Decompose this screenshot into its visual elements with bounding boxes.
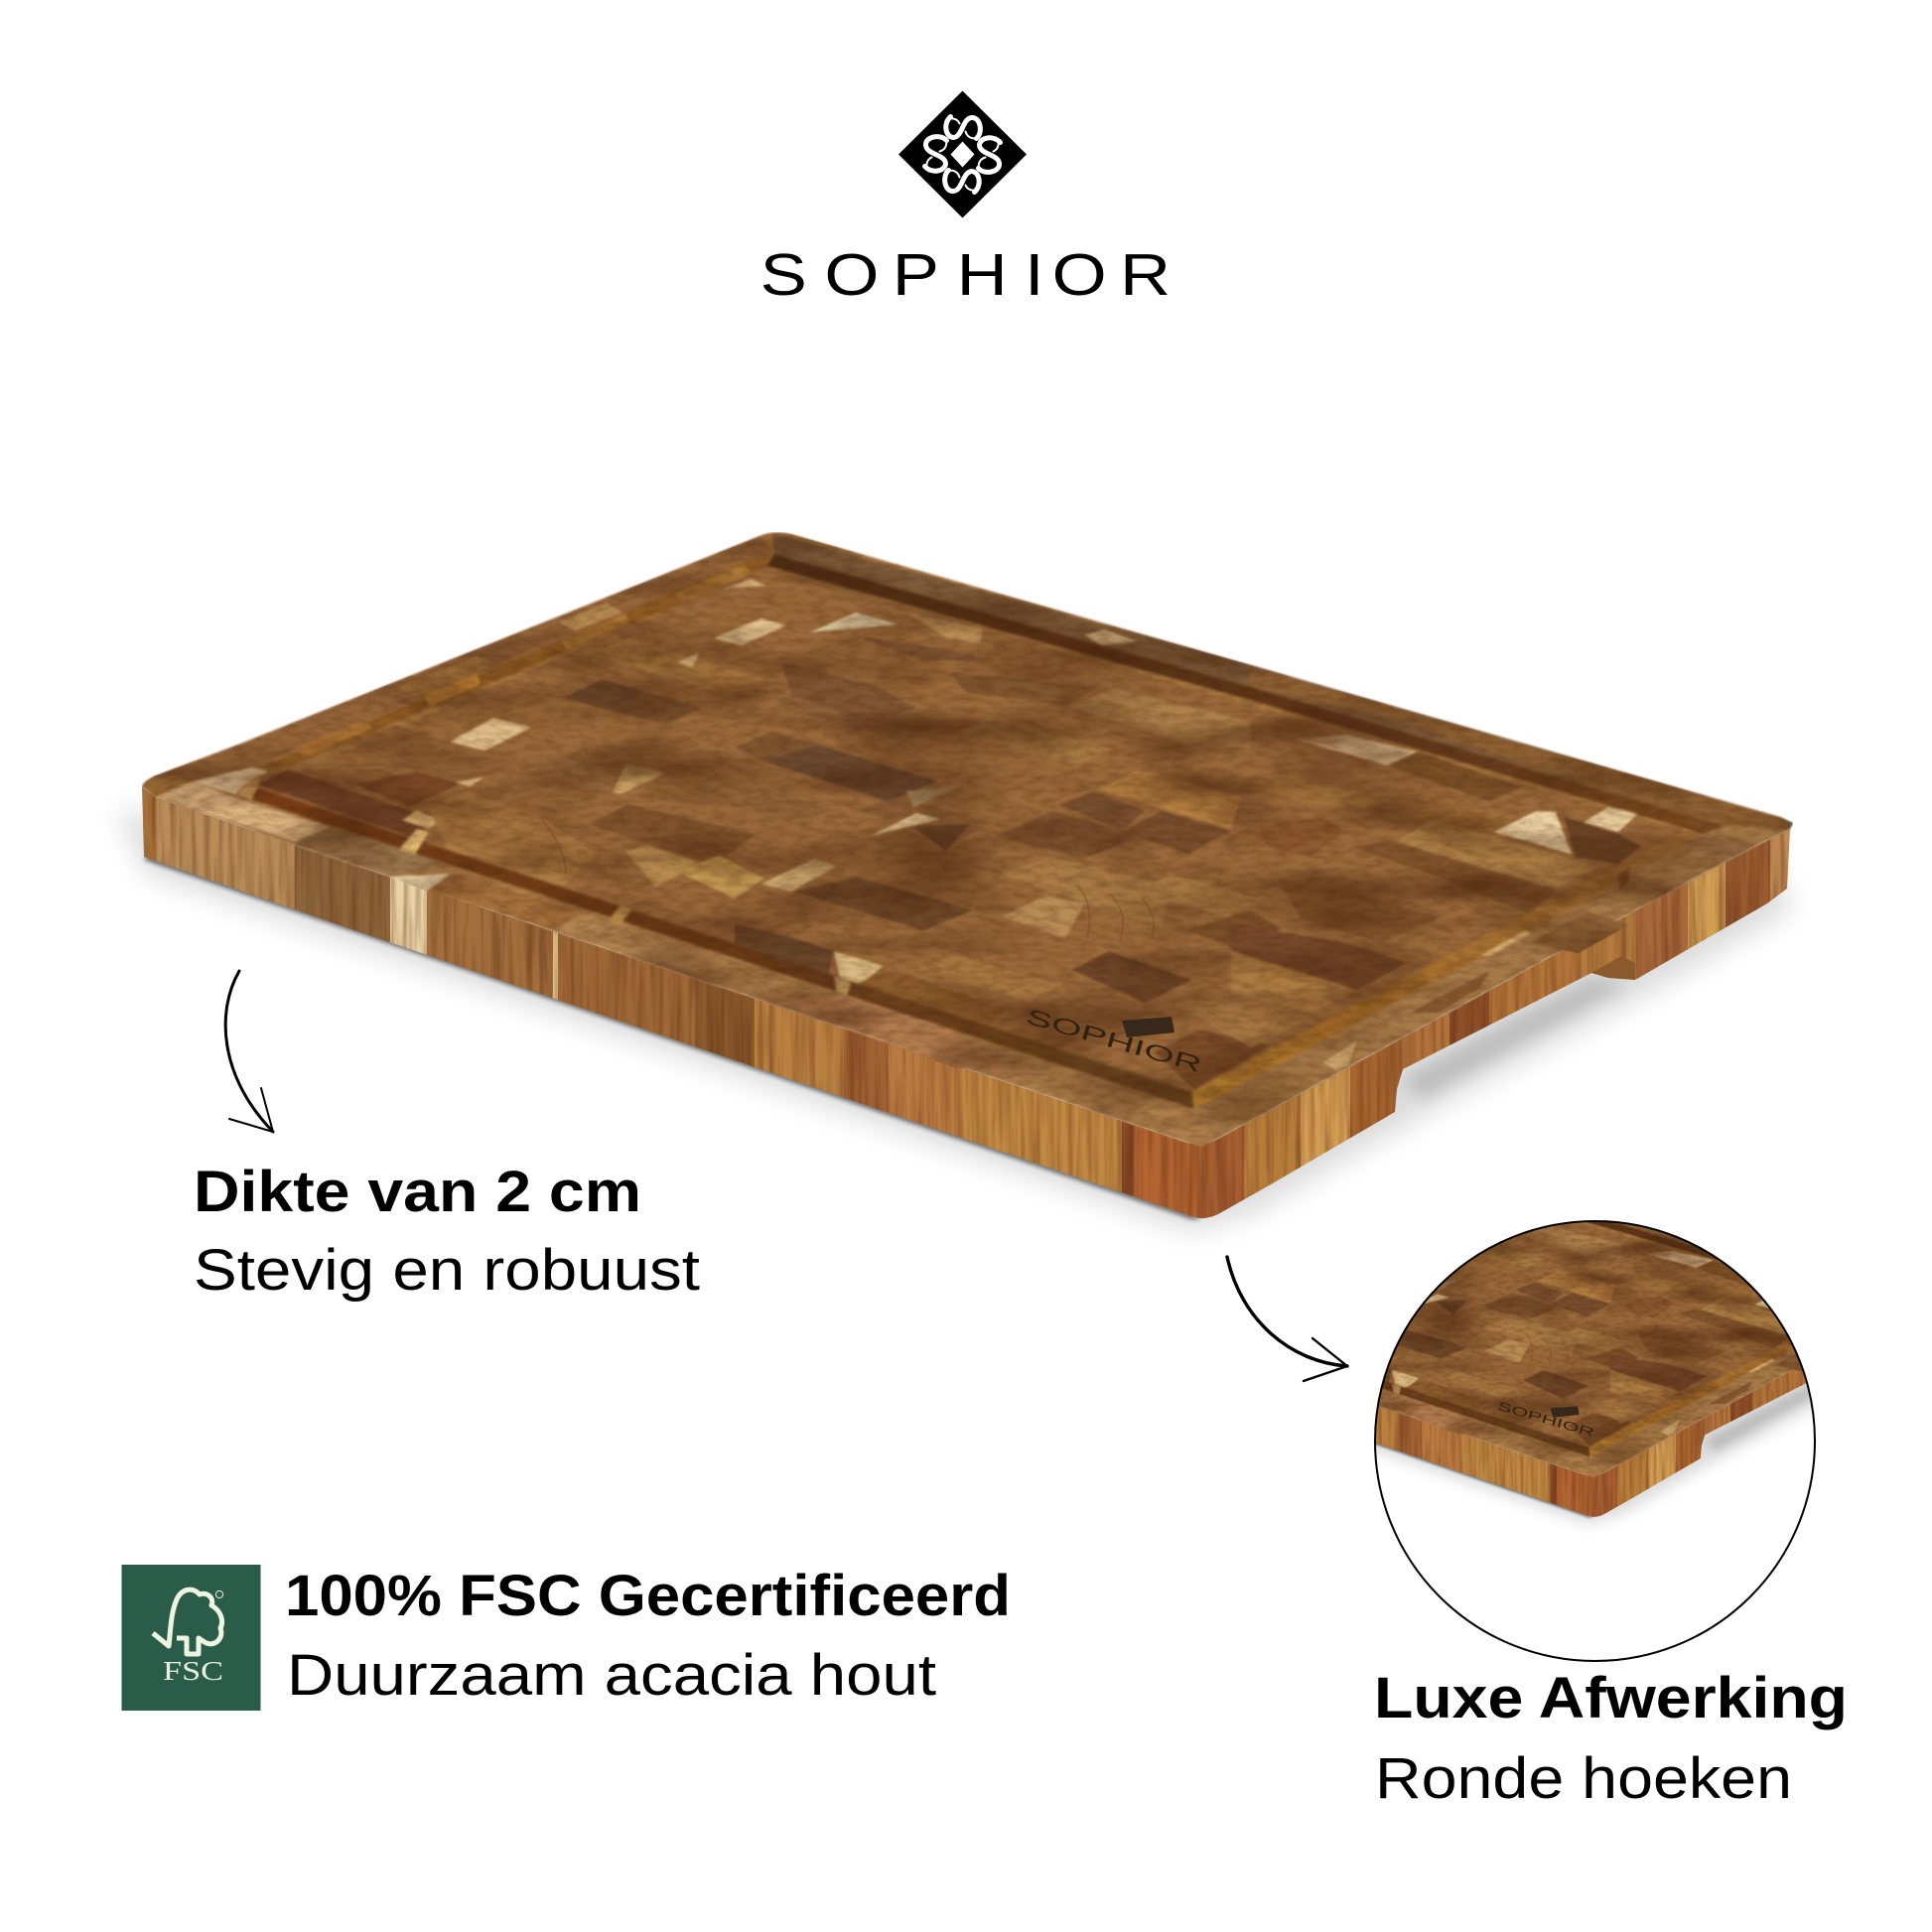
cutting board — [117, 532, 1807, 1231]
icon: FSC badge: FSC — [163, 1656, 223, 1686]
callout: FSC certification: Duurzaam acacia hout — [287, 1643, 936, 1708]
callout: thickness — [194, 1160, 700, 1303]
callout: FSC certification: 100% FSC Gecertificeerd — [285, 1564, 1011, 1628]
callout: thickness: Dikte van 2 cm — [194, 1160, 641, 1224]
icon: FSC badge — [121, 1565, 260, 1711]
icon: diamond ornament — [898, 91, 1027, 218]
callout: finish — [1374, 1666, 1848, 1811]
arrow: to thickness label — [225, 971, 273, 1132]
logo: Sophior — [760, 91, 1171, 308]
wordmark: SOPHIOR — [760, 242, 1171, 308]
callout: finish: Ronde hoeken — [1375, 1746, 1792, 1811]
callout: FSC certification — [285, 1564, 1011, 1708]
callout: thickness: Stevig en robuust — [194, 1238, 700, 1303]
callout: finish: Luxe Afwerking — [1374, 1666, 1848, 1730]
detail circle: rounded corner — [1374, 1220, 1816, 1662]
arrow: to detail circle — [1227, 1257, 1347, 1381]
